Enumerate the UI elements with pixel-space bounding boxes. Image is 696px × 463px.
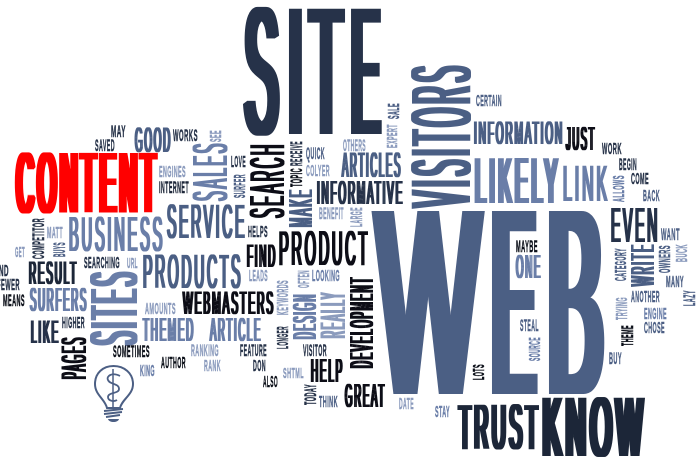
icon: light bulb with caduceus (95, 366, 133, 422)
word cloud: DON (253, 358, 266, 375)
word cloud: ARTICLE (210, 311, 262, 348)
word cloud: ARTICLES (342, 146, 402, 185)
word cloud: FEATURE (240, 341, 267, 360)
word cloud: LONGER (275, 326, 292, 349)
word cloud: AUTHOR (161, 355, 186, 372)
word cloud: BEGIN (619, 155, 637, 174)
word cloud: COME (631, 171, 649, 188)
word cloud: LARGE (347, 207, 366, 227)
word cloud: SALE (386, 103, 403, 119)
word cloud: GREAT (345, 377, 386, 414)
word cloud: LEADS (249, 268, 268, 285)
word: WEB: W (377, 154, 499, 452)
word cloud: LIKE (31, 314, 60, 350)
word cloud: OFTEN (296, 270, 313, 288)
word cloud: FIND (247, 238, 277, 274)
word cloud: MEANS (3, 291, 25, 310)
word cloud: RESULT (29, 255, 78, 291)
word cloud: REALLY (314, 291, 353, 338)
word: SITE (245, 0, 387, 174)
word cloud: AMOUNTS (145, 301, 176, 318)
word cloud: PAGES (55, 336, 94, 379)
word cloud: DESIGN (286, 293, 323, 339)
word cloud: WRITE (624, 243, 661, 286)
word cloud: INTERNET (159, 178, 189, 197)
word cloud: BUYS (50, 242, 69, 257)
word cloud: STEAL (520, 316, 539, 335)
word cloud: CATEGORY (613, 248, 630, 281)
word cloud: SALES (184, 141, 238, 201)
word cloud: MAYBE (516, 237, 538, 256)
word cloud: COMPETITOR (29, 218, 48, 259)
word cloud: TOPIC (287, 168, 306, 187)
word cloud: THEME (618, 325, 637, 346)
word cloud: WORK (602, 141, 622, 158)
word cloud: SHTML (283, 365, 304, 382)
word cloud: ALLOWS (611, 175, 628, 202)
word cloud: QUICK (306, 144, 325, 163)
word cloud: OWNERS (657, 245, 674, 273)
word cloud: BUCK (674, 244, 691, 262)
word cloud: LOTS (471, 364, 488, 380)
word cloud: SERVICE (167, 196, 247, 249)
word cloud: URL (127, 255, 138, 272)
word cloud: SURFERS (30, 281, 88, 318)
word cloud: HIGHER (62, 315, 85, 332)
word cloud: RANK (204, 358, 221, 375)
word cloud: HELP (311, 352, 344, 389)
word: WEB: E (493, 153, 545, 450)
word cloud: RANKING (191, 341, 219, 360)
word cloud: SAVED (95, 136, 115, 155)
word cloud: SEE (208, 130, 225, 142)
word cloud: KING (140, 363, 155, 380)
word cloud: BUY (609, 349, 622, 368)
word cloud: LOOKING (312, 268, 340, 285)
word cloud: GOOD (135, 121, 172, 160)
word cloud: SOMETIMES (113, 342, 150, 361)
word cloud: BENEFIT (319, 204, 344, 223)
word cloud: WEBMASTERS (183, 285, 275, 321)
word cloud: ENGINES (159, 164, 186, 181)
word cloud: SURFER (232, 174, 249, 198)
word cloud: WORKS (173, 126, 198, 145)
word cloud: GET (15, 244, 25, 261)
word cloud: STAY (435, 404, 450, 421)
word cloud: PRODUCT (279, 222, 370, 276)
word cloud: CONTENT (17, 136, 160, 232)
word cloud: COLYER (306, 163, 330, 180)
word cloud: OTHERS (343, 136, 366, 155)
word cloud: SEARCHING (84, 255, 120, 272)
word cloud: TODAY (301, 384, 320, 405)
word cloud: SITES (77, 269, 152, 345)
word cloud: DEVELOPMENT (343, 276, 380, 368)
word cloud: JUST (566, 120, 596, 157)
word cloud: THINK (319, 394, 338, 411)
word cloud: TRYING (614, 297, 631, 320)
word cloud: MAKE (282, 188, 319, 227)
word cloud: RECEIVE (287, 141, 306, 166)
word cloud: THEMED (143, 311, 195, 348)
word cloud: BACK (643, 188, 660, 205)
word: WEB: B (548, 153, 617, 451)
word cloud: KEYWORDS (275, 280, 292, 315)
word cloud: VISITOR (303, 341, 327, 360)
word: WEB (377, 153, 617, 452)
word cloud: ALSO (263, 374, 278, 391)
word cloud: BUSINESS (69, 208, 165, 262)
word cloud: SOURCE (527, 337, 544, 361)
word cloud: LOVE (231, 154, 246, 171)
word cloud: PRODUCTS (143, 246, 243, 299)
word cloud: EXPERT (384, 124, 401, 148)
word cloud: HELPS (248, 224, 268, 241)
word cloud: DATE (399, 396, 414, 413)
word cloud: MAY (111, 122, 126, 141)
word cloud: CERTAIN (476, 93, 502, 110)
word cloud: ONE (516, 248, 542, 285)
word cloud: INFORMATIVE (317, 174, 404, 211)
word cloud: MATT (47, 225, 63, 242)
